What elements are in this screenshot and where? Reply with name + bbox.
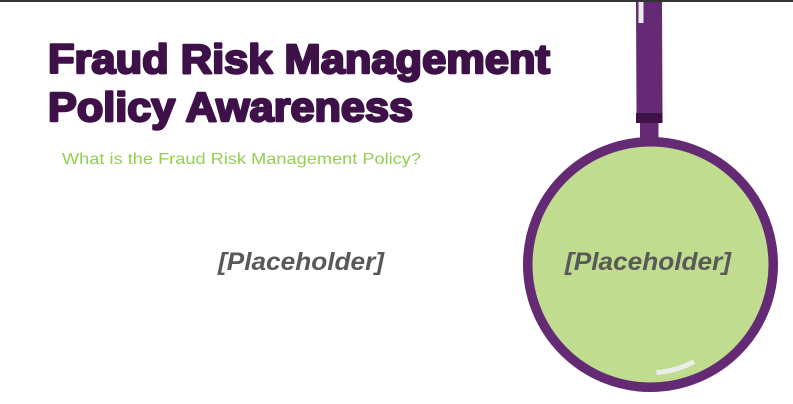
title xyxy=(48,36,550,130)
title: Fraud Risk Management xyxy=(48,36,550,82)
icon: magnifying glass xyxy=(528,2,773,387)
handle neck xyxy=(640,123,658,141)
handle highlight xyxy=(638,2,644,23)
top edge bar xyxy=(0,0,793,2)
magnifier handle xyxy=(636,2,662,114)
title: Policy Awareness xyxy=(48,84,413,130)
subtitle: What is the Fraud Risk Management Policy? xyxy=(62,151,421,168)
handle dark collar xyxy=(636,113,662,123)
left placeholder text: [Placeholder] xyxy=(217,248,386,276)
lens glare xyxy=(656,362,694,372)
magnifier lens xyxy=(528,142,773,387)
lens placeholder text: [Placeholder] xyxy=(564,248,733,276)
